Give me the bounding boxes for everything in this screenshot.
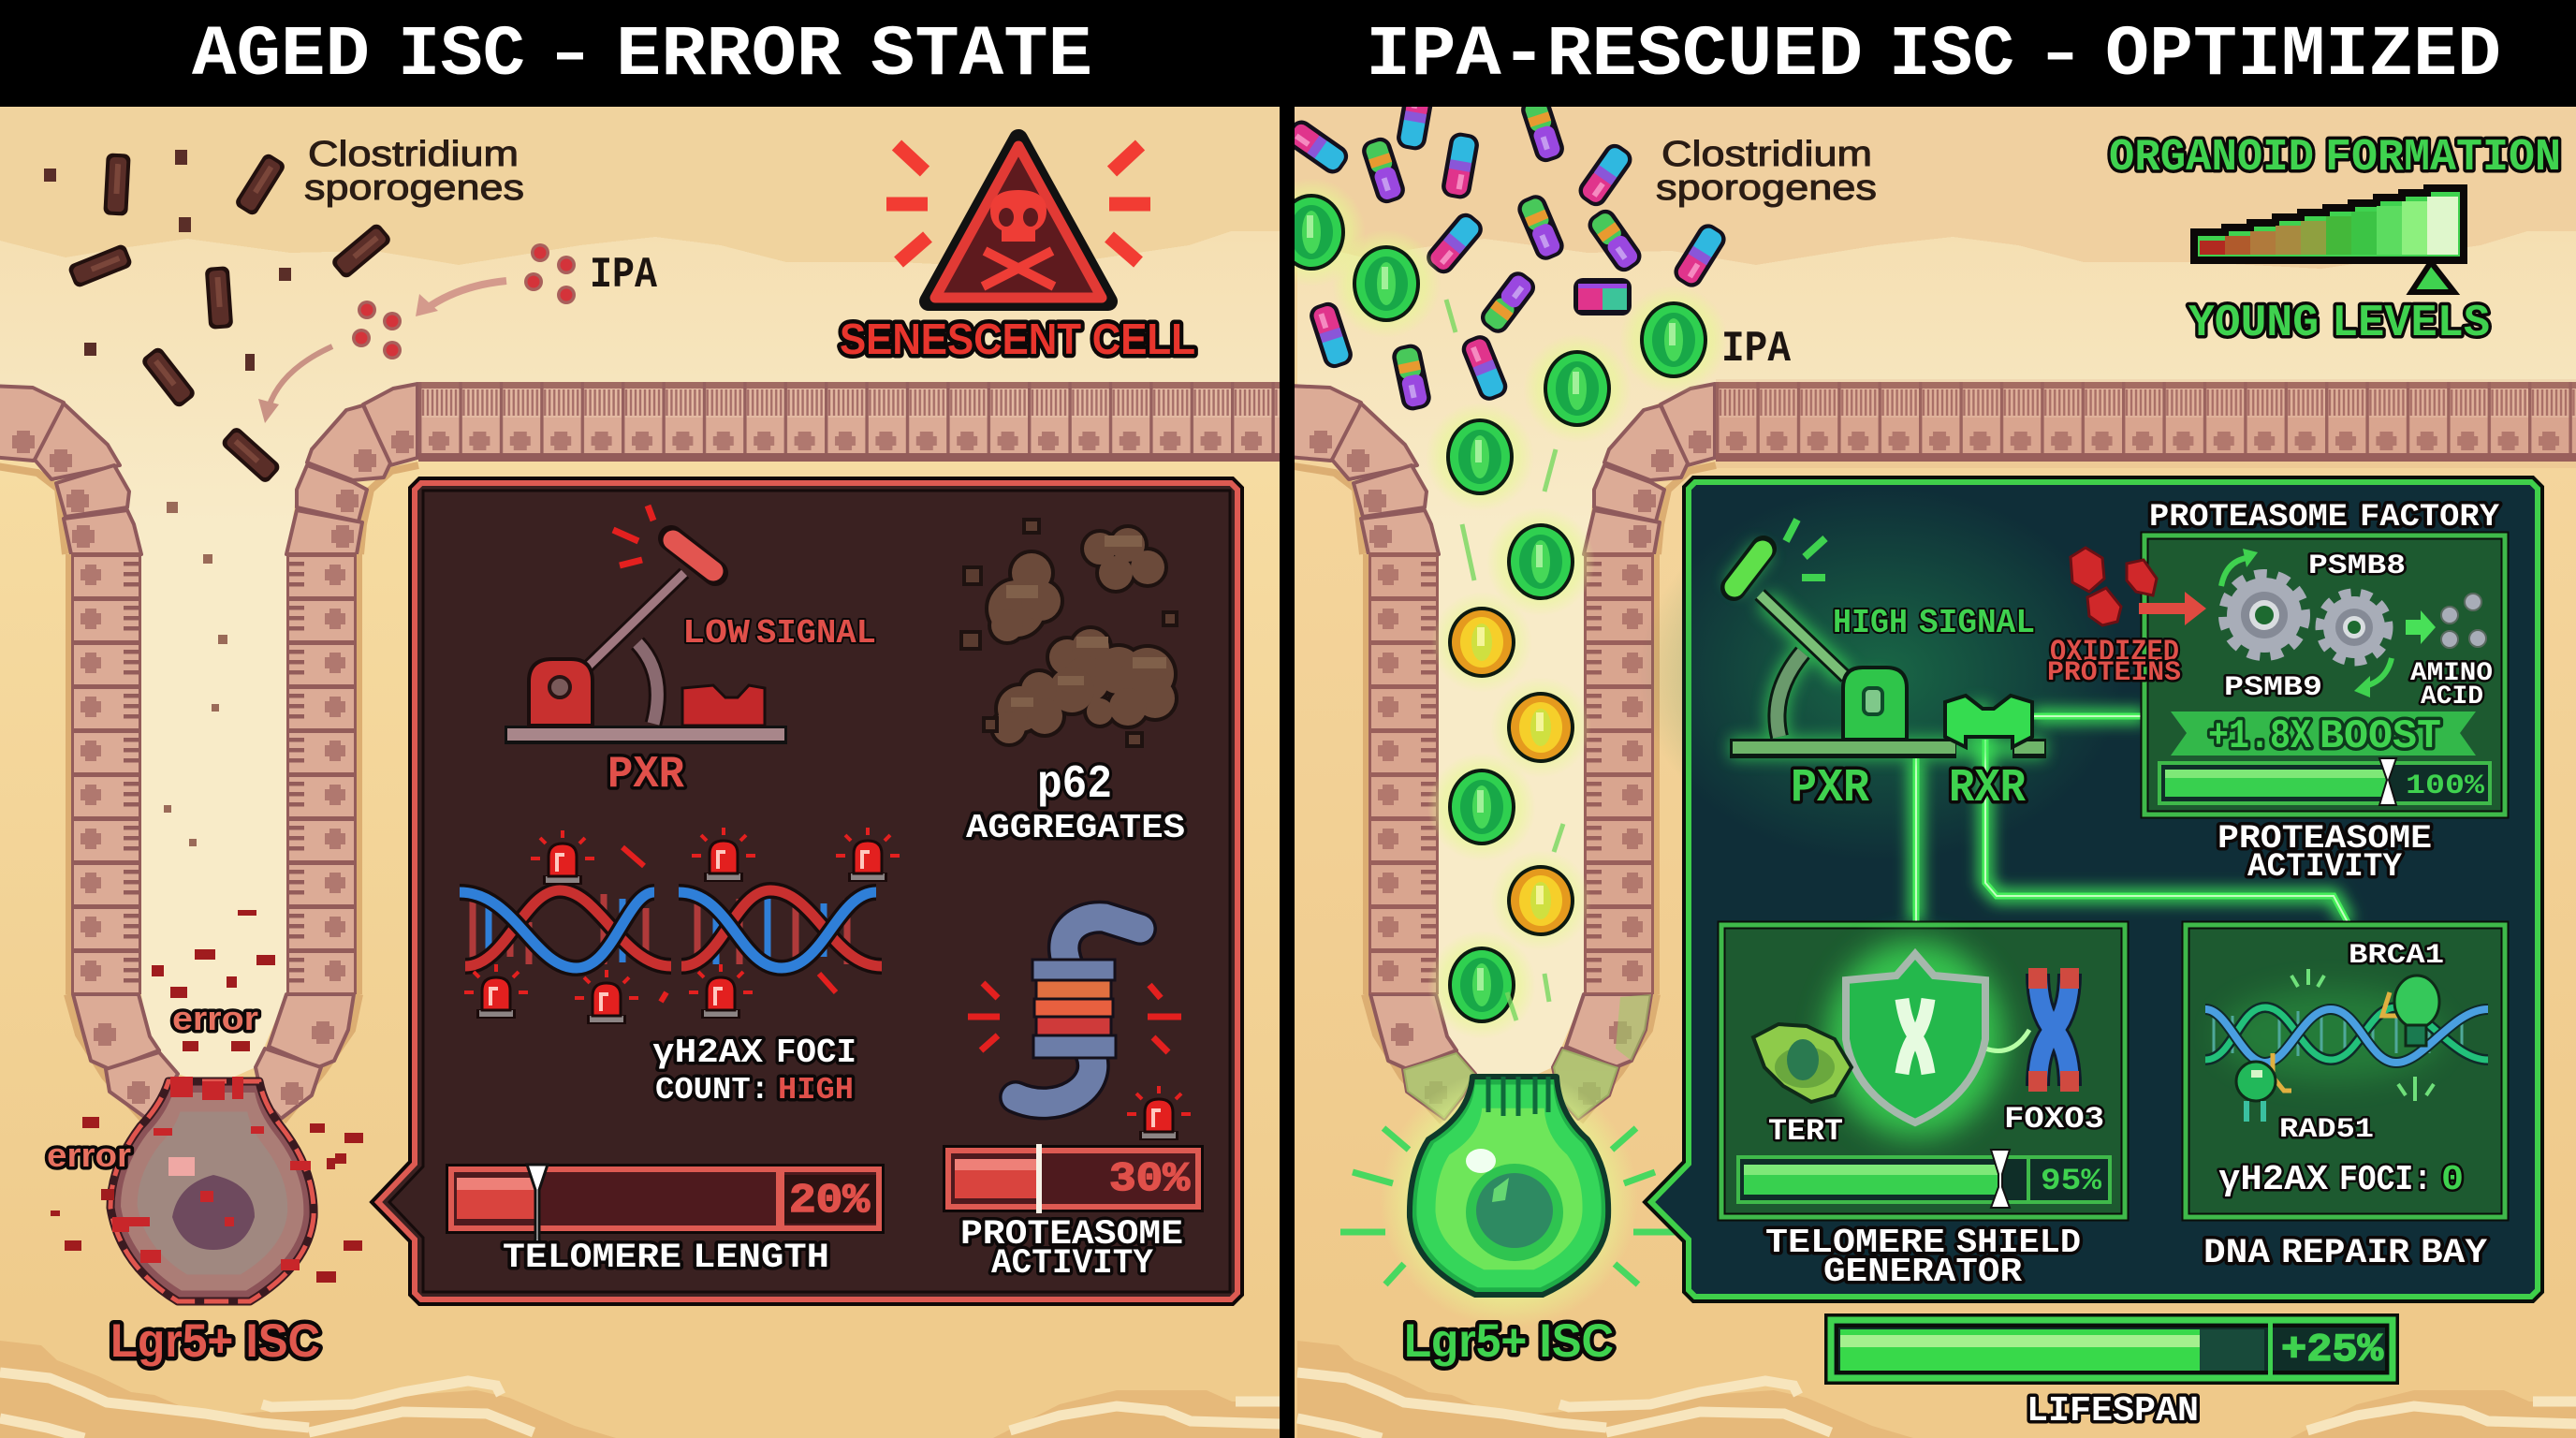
IPA molecules and arrows: aged: IPA (590, 251, 657, 300)
label: high signal (1833, 604, 2035, 642)
label: organoid formation: ORGANOID (2109, 133, 2314, 183)
label: PXR rescued: PXR (1791, 762, 1869, 815)
label: oxidized proteins (2047, 635, 2181, 689)
label: telomere length: LENGTH (693, 1239, 829, 1278)
bar: proteasome activity 100%: 100% (2406, 770, 2485, 802)
icon: senescent cell warning (886, 139, 1150, 301)
bar: proteasome activity 100% (2159, 758, 2490, 805)
epithelium and crypt: rescued (1288, 379, 2576, 1122)
label: p62 aggregates (966, 758, 1185, 847)
label: enzyme names: ACID (2421, 682, 2483, 712)
label: proteasome activity rescued: PROTEASOME (2217, 820, 2432, 858)
label: organoid formation (2109, 133, 2561, 183)
label: error beside cell: error (47, 1136, 131, 1174)
label: DNA repair bay (2203, 1234, 2488, 1273)
icon: damaged DNA with alarms (460, 828, 900, 1024)
panel: aged cell readout (378, 483, 1237, 1299)
label: enzyme names (2224, 550, 2493, 712)
label: enzyme names: PSMB9 (2224, 672, 2322, 704)
icon: PXR lever low signal (505, 506, 787, 744)
label: TERT: TERT (1768, 1114, 1843, 1149)
signal lines (1916, 716, 2348, 922)
label: Clostridium sporogenes rescued (1656, 135, 1877, 208)
bar: telomere length 20% (448, 1165, 882, 1263)
label: Lgr5+ ISC aged: Lgr5+ ISC (110, 1314, 320, 1367)
header: rescued: – (2043, 15, 2077, 95)
icon: p62 aggregates (961, 520, 1177, 746)
bacteria: aged Clostridium (44, 150, 393, 846)
label: proteasome activity aged (960, 1215, 1183, 1284)
label: Clostridium sporogenes aged: Clostridium (308, 135, 519, 174)
rescued Lgr5+ stem cell (1340, 1069, 1676, 1328)
icon: PXR and RXR lever high signal (1730, 520, 2046, 758)
label: proteasome activity aged: ACTIVITY (991, 1244, 1154, 1284)
label: telomere shield generator: GENERATOR (1823, 1253, 2022, 1291)
green-tinted crypt base cells (1403, 994, 1651, 1119)
label: lifespan: LIFESPAN (2027, 1391, 2199, 1431)
bar: telomere length 20%: 20% (789, 1178, 871, 1225)
label: gamma H2AX foci count: FOCI (776, 1034, 856, 1072)
banner: boost: +1.8X (2208, 713, 2311, 760)
arrow: red input (2139, 592, 2206, 625)
panel: proteasome factory: PROTEASOME (2149, 500, 2348, 536)
right panel: rescued ISC background (1288, 107, 2576, 1438)
label: young levels (2188, 299, 2490, 349)
aged Lgr5+ stem cell (51, 1077, 363, 1301)
label: gamma H2AX foci count (652, 1034, 856, 1108)
label: proteasome activity rescued: ACTIVITY (2247, 848, 2402, 886)
label: gamma H2AX foci zero: FOCI: (2339, 1160, 2432, 1200)
label: p62 aggregates: AGGREGATES (966, 809, 1185, 847)
label: gamma H2AX foci zero (2218, 1160, 2464, 1200)
header: rescued: IPA-RESCUED (1366, 15, 1863, 95)
icon: gears (2221, 549, 2486, 697)
bar: proteasome activity 30% (945, 1144, 1201, 1213)
label: IPA rescued: IPA (1721, 325, 1791, 374)
label: gamma H2AX foci count: HIGH (778, 1073, 854, 1108)
label: DNA repair bay: BAY (2421, 1234, 2488, 1273)
label: high signal: SIGNAL (1919, 604, 2035, 642)
panel: proteasome factory: FACTORY (2360, 500, 2500, 536)
label: telomere length (503, 1239, 829, 1278)
debris fragments in crypt lumen (152, 910, 275, 1051)
label: telomere shield generator: TELOMERE (1765, 1224, 1945, 1262)
banner: boost: BOOST (2320, 713, 2441, 760)
label: enzyme names: AMINO (2410, 659, 2493, 688)
panel: telomere shield generator (1721, 925, 2125, 1217)
label: error in lumen: error (172, 999, 258, 1037)
label: BRCA1: BRCA1 (2349, 940, 2444, 972)
capsules: rescued microbiota (1295, 107, 1726, 410)
bar: lifespan +25% (1827, 1316, 2396, 1382)
banner: boost (2171, 712, 2476, 760)
IPA green and gold molecules with arrows (1257, 178, 1728, 1039)
label: low signal (682, 614, 876, 653)
label: oxidized proteins: OXIDIZED (2050, 635, 2179, 669)
icon: FOXO3 chromosome (2038, 968, 2070, 1092)
label: PXR aged: PXR (607, 750, 684, 800)
label: RXR: RXR (1949, 762, 2026, 815)
label: Clostridium sporogenes aged (304, 135, 524, 208)
epithelium and crypt: aged (0, 382, 1308, 1122)
header: aged: ERROR (616, 15, 842, 95)
header: rescued: OPTIMIZED (2105, 15, 2501, 95)
icon: impaired proteasome (968, 917, 1191, 1140)
label: low signal: SIGNAL (756, 614, 876, 653)
icon: oxidized proteins (2071, 548, 2157, 625)
label: telomere length: TELOMERE (503, 1239, 681, 1278)
panel: proteasome factory (2047, 500, 2505, 814)
bar: proteasome activity 30%: 30% (1109, 1156, 1191, 1203)
label: DNA repair bay: DNA (2203, 1234, 2271, 1273)
panel: rescued cell readout (1638, 482, 2538, 1297)
label: FOXO3: FOXO3 (2004, 1102, 2104, 1137)
icon: shield (1826, 941, 2029, 1137)
label: RAD51: RAD51 (2279, 1114, 2374, 1146)
label: telomere shield generator (1765, 1224, 2081, 1291)
bar: telomere 95%: 95% (2041, 1164, 2102, 1198)
left panel: aged ISC background (0, 107, 1310, 1438)
bar: lifespan +25%: +25% (2281, 1328, 2384, 1372)
IPA molecules and arrows: aged (258, 243, 657, 423)
header: aged: AGED (192, 15, 370, 95)
divider between panels (1280, 0, 1295, 1438)
chart: organoid formation ramp (2194, 188, 2464, 292)
label: proteasome activity aged: PROTEASOME (960, 1215, 1183, 1255)
label: high signal: HIGH (1833, 604, 1908, 642)
label: oxidized proteins: PROTEINS (2047, 657, 2181, 689)
label: DNA repair bay: REPAIR (2281, 1234, 2410, 1273)
header: rescued: ISC (1889, 15, 2014, 95)
label: gamma H2AX foci count: γH2AX (652, 1034, 763, 1072)
label: young levels: YOUNG (2188, 299, 2319, 349)
header: aged: ISC (398, 15, 525, 95)
header: aged: – (552, 15, 588, 95)
label: low signal: LOW (682, 614, 750, 653)
label: p62 aggregates: p62 (1037, 758, 1112, 812)
label: proteasome activity rescued (2217, 820, 2432, 886)
header: aged: STATE (871, 15, 1092, 95)
icon: TERT enzyme (1753, 1024, 1852, 1102)
header: aged (0, 0, 1280, 107)
label: enzyme names: PSMB8 (2308, 550, 2406, 582)
label: gamma H2AX foci zero: 0 (2441, 1160, 2464, 1200)
icon: repaired DNA with robots (2205, 969, 2488, 1122)
label: telomere shield generator: SHIELD (1956, 1224, 2081, 1262)
bar: telomere 95% (1738, 1150, 2110, 1208)
label: gamma H2AX foci zero: γH2AX (2218, 1160, 2328, 1200)
panel: DNA repair bay (2186, 925, 2505, 1217)
label: Clostridium sporogenes rescued: Clostridium (1661, 135, 1872, 174)
label: Clostridium sporogenes aged: sporogenes (304, 169, 524, 208)
label: Clostridium sporogenes rescued: sporogenes (1656, 169, 1877, 208)
label: Lgr5+ ISC rescued: Lgr5+ ISC (1404, 1314, 1614, 1367)
label: young levels: LEVELS (2332, 299, 2490, 349)
header: rescued (1295, 0, 2576, 107)
label: organoid formation: FORMATION (2325, 133, 2561, 183)
label: senescent cell: SENESCENT CELL (840, 315, 1195, 363)
label: gamma H2AX foci count: COUNT: (655, 1073, 769, 1108)
